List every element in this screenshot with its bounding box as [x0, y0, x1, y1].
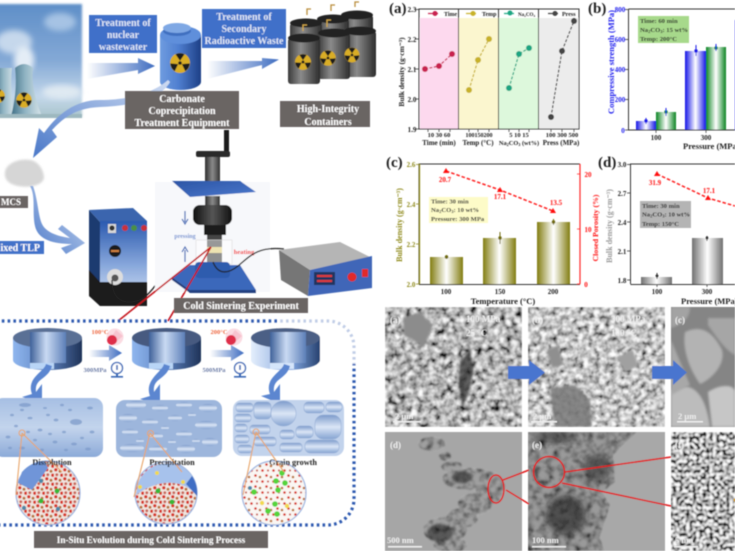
label: 300 MPa: 300MPa	[83, 367, 107, 374]
label: high-integrity containers	[280, 101, 370, 128]
axis labels b: 200	[615, 96, 626, 104]
icon: carbonate coprecipitation cylinder	[160, 23, 201, 90]
SEM image b	[528, 307, 665, 427]
series: Na2CO3	[504, 10, 535, 91]
label: treatment of nuclear wastewater	[89, 15, 157, 53]
label: carbonate coprecipitation treatment equipment: Carbonate	[159, 94, 205, 105]
disc: dissolution stage	[13, 328, 82, 370]
TEM image d: (d)	[390, 440, 401, 450]
bars c	[430, 219, 570, 284]
image: nuclear cooling towers	[0, 4, 82, 118]
SEM image a: 100 MPa	[466, 314, 501, 324]
axis labels d: 1.8	[618, 277, 627, 285]
SEM image b: 100 °C	[611, 328, 637, 338]
SEM image a	[385, 307, 522, 427]
axis labels a: Na	[499, 140, 507, 147]
dotted frame	[0, 321, 354, 525]
icon: thermometer 200	[210, 328, 242, 346]
series: temperature: Temp	[482, 12, 497, 18]
axis labels a: Temp (°C)	[462, 139, 494, 147]
icon: thermometer 100	[91, 328, 124, 346]
note b: 3	[660, 29, 663, 34]
arrows between SEM images	[508, 360, 687, 385]
axis labels a: (wt%)	[520, 140, 539, 147]
icon: thermometer 100: 100°C	[91, 329, 109, 336]
series: pressure	[548, 11, 577, 120]
axis labels a: 10 30 60	[428, 132, 450, 139]
axis labels d: 2.4	[618, 219, 627, 227]
label: 500 MPa	[202, 362, 246, 378]
arrows: disc to microstructure	[22, 364, 290, 405]
line: closed porosity c: 20.7	[439, 176, 452, 184]
axes b	[628, 9, 735, 130]
label: MCS: MCS	[1, 197, 21, 207]
line: closed porosity d: 17.1	[703, 187, 716, 195]
SEM image c: 2 μm	[678, 411, 696, 421]
axes d	[630, 164, 735, 284]
axis labels a: 3	[518, 142, 520, 147]
icon: thermometer 200: 200°C	[210, 329, 228, 336]
series: time: Time	[444, 12, 458, 18]
note d: 2	[650, 214, 653, 218]
axis labels b	[606, 6, 626, 135]
note c: Time: 30 min	[431, 198, 469, 206]
x labels b: 300	[701, 134, 712, 142]
note b	[638, 16, 689, 43]
SEM image c: (c)	[675, 315, 685, 325]
SEM image b: (b)	[532, 315, 543, 325]
bars d	[641, 236, 723, 284]
label: treatment of nuclear wastewater: wastewater	[99, 42, 148, 53]
panel letter b: (b)	[588, 1, 606, 17]
axis labels d: 2.7	[618, 190, 627, 198]
axis labels a: 2.2	[408, 36, 417, 44]
axis labels b: Compressive strength (MPa)	[606, 10, 616, 114]
axis labels c: Temperature (°C)	[471, 296, 535, 306]
panel: treatment flow overview	[0, 2, 376, 321]
note b: Time: 60 min	[640, 18, 678, 25]
axis labels b: 800	[615, 6, 626, 14]
label: treatment of secondary radioactive waste: Treatment of	[216, 12, 272, 23]
x labels b: 100	[651, 134, 662, 142]
SEM image c	[671, 307, 735, 427]
icon: temperature controller	[279, 242, 372, 296]
chart b: compressive strength	[588, 1, 735, 151]
axis labels c: 2.4	[407, 201, 416, 209]
note c: CO	[441, 207, 451, 214]
panel: in-situ evolution	[0, 318, 358, 548]
axis labels a: CO	[509, 140, 518, 147]
note d: Time: 30 min	[642, 203, 680, 210]
series: Na2CO3: Na	[518, 13, 524, 18]
series: time	[422, 11, 458, 72]
label: 500 MPa: 500MPa	[202, 367, 226, 374]
axis labels c: 10	[584, 226, 592, 234]
molecular structure: dissolution	[16, 461, 80, 525]
line: closed porosity d	[649, 171, 735, 206]
panel letter c: (c)	[386, 155, 403, 171]
line: closed porosity c: 13.5	[550, 199, 563, 207]
SEM image a: 25 °C	[466, 328, 487, 338]
red zoom callouts	[488, 456, 671, 506]
SEM image b: 300 MPa	[611, 314, 646, 324]
SEM image b: 2 μm	[533, 411, 551, 421]
axis labels d: 300	[702, 288, 713, 296]
series: Na2CO3: 3	[533, 14, 535, 18]
press background	[155, 182, 270, 292]
zoom lines	[16, 432, 284, 497]
label: carbonate coprecipitation treatment equipment: Coprecipitation	[148, 106, 216, 117]
stage label: grain growth: Grain growth	[269, 458, 317, 467]
microstructure: dissolution block	[0, 398, 103, 457]
icon: mixing machine	[89, 208, 182, 306]
icon: cold sintering press	[172, 130, 284, 293]
axis labels a: 100150200	[466, 133, 492, 139]
axis labels a: 1.9	[408, 126, 417, 134]
note c: Pressure: 300 MPa	[431, 216, 485, 223]
axis labels a: 2.3	[408, 6, 417, 14]
label: in-situ evolution	[34, 531, 268, 548]
label: in-situ evolution: In-Situ Evolution during Cold Sintering Process	[57, 535, 246, 545]
axis labels c: 2.0	[407, 281, 416, 289]
axis labels d	[605, 161, 735, 306]
note d: Temp: 150°C	[642, 221, 679, 228]
chart a: bulk density main effects	[389, 1, 580, 147]
axis labels a: Time (min)	[422, 139, 456, 147]
SEM image a: 2 μm	[395, 411, 413, 421]
note d: : 10 wt%	[664, 212, 690, 218]
axis labels c: 2.2	[407, 241, 416, 249]
label: high-integrity containers: Containers	[304, 117, 352, 128]
chart d: density and closed porosity vs pressure	[598, 155, 735, 306]
disc: grain growth stage	[251, 328, 320, 370]
note b: CO	[650, 27, 660, 34]
line: closed porosity d: 31.9	[649, 179, 662, 187]
HRTEM image f: 5 nm	[675, 535, 693, 545]
series: Na2CO3: 2	[524, 14, 526, 18]
x labels b	[651, 134, 735, 151]
note b: Temp: 200°C	[640, 36, 677, 43]
note c: : 10 wt%	[453, 207, 479, 214]
series: pressure: Press	[562, 12, 576, 18]
note c: 2	[439, 209, 442, 214]
axis labels d: Bulk density (g·cm⁻³)	[605, 189, 614, 263]
microstructure: precipitation block	[116, 400, 222, 457]
axes c	[419, 164, 580, 284]
axis labels a: 5 10 15	[509, 132, 530, 139]
axis labels c: 0	[584, 281, 588, 289]
microstructure: grain growth block	[233, 400, 344, 456]
arrow: equipment to containers	[207, 58, 279, 79]
note b: 2	[648, 29, 651, 34]
arrow: stage one to two	[89, 345, 122, 361]
panel letter d: (d)	[598, 155, 616, 171]
TEM image e: 100 nm	[532, 535, 559, 545]
series: temperature	[466, 11, 497, 93]
molecular structure: grain growth	[242, 461, 306, 525]
TEM image e: (e)	[532, 440, 542, 450]
HRTEM image f	[671, 432, 735, 551]
label: carbonate coprecipitation treatment equipment	[125, 91, 239, 129]
axis labels c: 200	[548, 288, 559, 296]
axis labels a: Press (MPa)	[543, 139, 580, 147]
axis labels a: 2	[507, 142, 509, 147]
callout lines: sample to panel	[118, 247, 211, 321]
label: treatment of nuclear wastewater: nuclear	[107, 30, 140, 41]
disc: precipitation stage	[132, 328, 201, 370]
stage label: dissolution: Dissolution	[32, 458, 72, 467]
axis labels d: 3.0	[618, 161, 627, 169]
note d: CO	[652, 212, 662, 218]
series: Na2CO3: CO	[526, 13, 533, 18]
arrow: powder to mixer	[30, 186, 85, 254]
arrow: wastewater to equipment	[87, 58, 155, 79]
note d	[640, 201, 691, 228]
zoom markers	[19, 429, 259, 436]
icon: MCS powder	[5, 160, 44, 187]
note b: : 15 wt%	[662, 27, 688, 34]
note c: 3	[451, 209, 454, 214]
chart c: density and closed porosity vs temperature	[386, 155, 600, 306]
icon: cold sintering press: pressing	[174, 234, 196, 240]
axis labels a: 100 300 500	[546, 132, 578, 139]
axis labels d: 100	[652, 288, 663, 296]
note c	[429, 197, 488, 223]
label: cold sintering experiment: Cold Sintering Experiment	[183, 301, 299, 312]
axis labels c: 20	[584, 171, 592, 179]
axis labels c: 2.6	[407, 161, 416, 169]
axis labels a: 2.0	[408, 96, 417, 104]
TEM image e	[528, 431, 665, 551]
icon: cold sintering press: heating	[234, 249, 255, 256]
bars b	[636, 20, 735, 130]
note b: Na	[640, 27, 648, 34]
molecular structure: precipitation	[135, 462, 197, 524]
axis labels b: 600	[615, 36, 626, 44]
note d: Na	[642, 212, 650, 218]
axis labels c: 100	[441, 288, 452, 296]
line: closed porosity c: 17.1	[494, 193, 507, 201]
axis labels a	[397, 6, 580, 147]
note d: 3	[662, 214, 665, 218]
label: treatment of nuclear wastewater: Treatment of	[95, 18, 151, 29]
axis labels b: 400	[615, 66, 626, 74]
arrow: stage two to three	[210, 345, 244, 361]
TEM image d	[385, 432, 522, 551]
axis labels c: 150	[495, 288, 506, 296]
axis labels a: 2.1	[408, 66, 417, 74]
label: MCS	[0, 196, 28, 208]
label: treatment of secondary radioactive waste: Secondary	[222, 24, 266, 35]
axis labels d: 2.1	[618, 248, 627, 256]
micrograph grid	[385, 307, 735, 551]
SEM image a: (a)	[390, 315, 400, 325]
note c: Na	[431, 207, 439, 214]
TEM image d: 500 nm	[387, 535, 414, 545]
axis labels c	[395, 161, 600, 306]
line: closed porosity c	[439, 168, 563, 213]
label: carbonate coprecipitation treatment equipment: Treatment Equipment	[135, 118, 230, 129]
label: treatment of secondary radioactive waste: Radioactive Waste	[205, 36, 284, 47]
label: cold sintering experiment	[174, 298, 308, 313]
panel letter a: (a)	[389, 1, 406, 17]
label: treatment of secondary radioactive waste	[202, 9, 286, 48]
label: high-integrity containers: High-Integrity	[297, 104, 359, 115]
icon: high-integrity containers	[288, 2, 376, 84]
axis labels b: 0	[621, 127, 625, 135]
label: 300 MPa	[83, 362, 123, 378]
axis labels c: Closed Porosity (%)	[591, 194, 600, 262]
HRTEM image f: (f)	[675, 440, 684, 450]
stage label: precipitation: Precipitation	[149, 458, 195, 467]
arrow: curved to MCS powder	[33, 80, 170, 158]
axis labels a: Bulk density (g·cm⁻³)	[397, 37, 406, 107]
axis labels c: Bulk density (g·cm⁻³)	[395, 188, 404, 262]
